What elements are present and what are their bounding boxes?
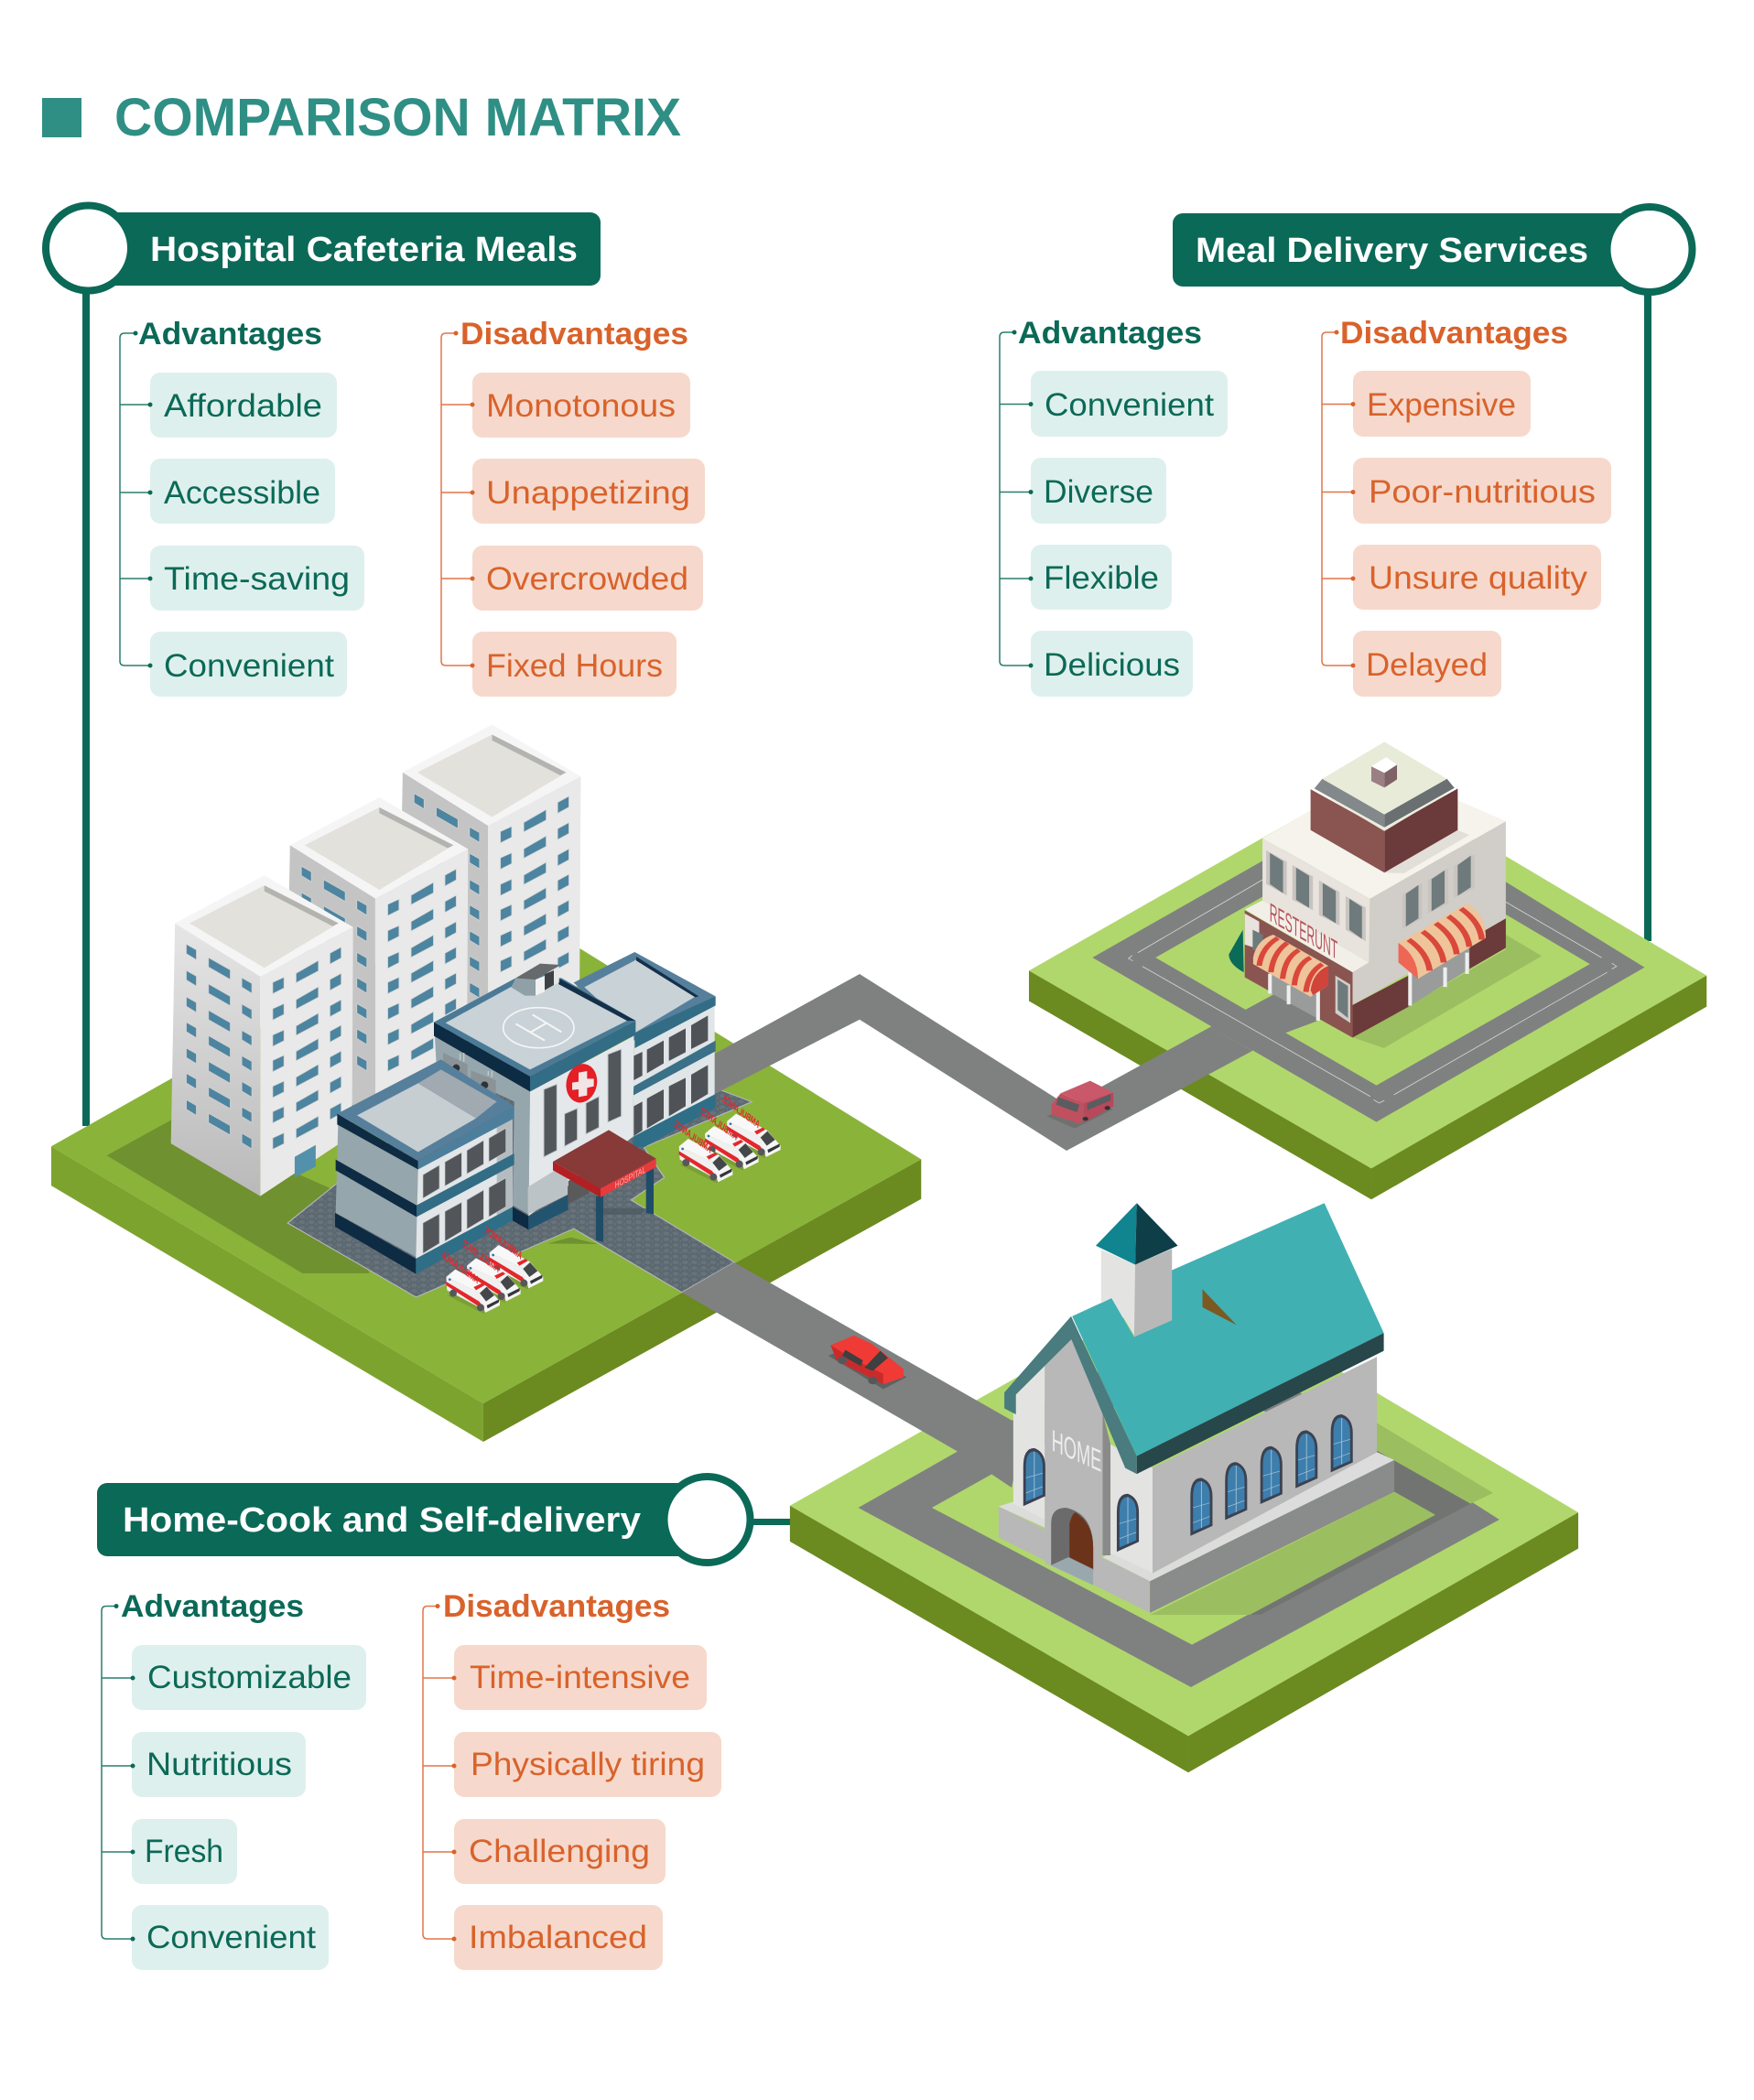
advantage: Delicious: Delicious [1044,647,1180,683]
disadvantages heading: Disadvantages [460,317,688,352]
disadvantages tree [1322,332,1353,666]
connector line: home [746,1519,801,1525]
disadvantage: Physically tiring [454,1732,721,1797]
advantage: Time-saving: Time-saving [164,561,350,597]
tree dots orange [454,331,475,668]
pillars [1270,953,1467,1021]
advantage: Accessible: Accessible [164,475,320,511]
plinth [999,1452,1394,1613]
advantage: Fresh: Fresh [145,1834,223,1869]
restaurant platform [1029,776,1706,1199]
advantage: Diverse [1031,458,1166,524]
disadvantage: Imbalanced [454,1905,663,1970]
disadvantages heading: Disadvantages [1340,316,1568,351]
home illustration: HOME [1052,1423,1101,1478]
disadvantage: Fixed Hours: Fixed Hours [486,648,663,684]
disadvantage: Unappetizing [472,459,705,524]
header bar [1173,213,1649,287]
roof [1004,1203,1384,1474]
connector line: delivery [1644,284,1651,941]
advantage: Affordable: Affordable [164,388,322,424]
disadvantage: Time-intensive [454,1645,707,1710]
header text: Hospital Cafeteria Meals [150,231,578,269]
disadvantage: Challenging: Challenging [469,1834,650,1869]
canopy [547,1130,656,1244]
air conditioners [443,1053,496,1097]
title text: COMPARISON MATRIX [114,88,681,147]
house walls [1013,1335,1377,1586]
advantage: Convenient [150,632,347,697]
delivery van [1046,1081,1113,1129]
restaurant windows [1266,850,1475,941]
advantage: Convenient [1031,371,1228,437]
right wing [574,952,716,1147]
tree dots [114,1604,135,1941]
disadvantage: Poor-nutritious [1353,458,1611,524]
windows [1023,1414,1353,1552]
roof vent [511,964,561,996]
restaurant tower [1311,741,1469,873]
header bar [97,1483,701,1556]
advantage: Time-saving [150,546,364,611]
ambulances: right group [673,1093,781,1183]
advantages tree [1000,332,1031,666]
road: hospital to restaurant [705,974,1252,1151]
ambulances: front group [440,1224,544,1314]
disadvantage: Overcrowded: Overcrowded [486,561,688,597]
connector line: hospital [82,284,90,1126]
advantage: Delicious [1031,631,1193,697]
advantage: Convenient: Convenient [146,1920,316,1955]
restaurant illustration [1046,741,1506,1129]
advantages heading: Advantages [121,1589,304,1624]
tree dots [1012,330,1034,668]
right awning [1399,904,1486,979]
restaurant walls [1245,768,1506,1038]
panel: meal delivery services [1000,207,1692,697]
advantage: Customizable: Customizable [147,1660,352,1695]
disadvantage: Imbalanced: Imbalanced [469,1920,647,1955]
hospital main building [335,952,781,1314]
disadvantage: Overcrowded [472,546,703,611]
advantage: Accessible [150,459,335,524]
advantages tree [102,1606,133,1939]
disadvantage: Time-intensive: Time-intensive [470,1660,690,1695]
disadvantage: Delayed [1353,631,1501,697]
disadvantage: Expensive: Expensive [1367,387,1516,423]
canopy: HOSPITAL [615,1164,646,1191]
restaurant illustration: RESTERUNT [1270,898,1337,966]
disadvantages tree [441,333,472,666]
disadvantage: Unsure quality: Unsure quality [1369,560,1588,596]
back tower [398,725,580,1045]
disadvantage: Unappetizing: Unappetizing [486,475,690,511]
panel: hospital cafeteria meals [46,205,705,697]
advantage: Diverse: Diverse [1044,474,1153,510]
advantage: Nutritious: Nutritious [146,1747,292,1782]
disadvantage: Challenging [454,1819,666,1884]
disadvantages tree [423,1606,454,1939]
header circle [665,1477,751,1563]
hospital platform [51,896,921,1442]
advantage: Nutritious [132,1732,306,1797]
advantage: Fresh [132,1819,237,1884]
disadvantage: Monotonous: Monotonous [486,388,676,424]
main block [434,978,635,1229]
advantages heading: Advantages [138,317,322,352]
disadvantage: Delayed: Delayed [1366,647,1488,683]
advantage: Convenient: Convenient [164,648,334,684]
disadvantages heading: Disadvantages [443,1589,670,1624]
tree [1229,930,1244,972]
red car [828,1336,906,1389]
front tower [171,875,353,1196]
door [1051,1508,1093,1586]
disadvantage: Expensive [1353,371,1531,437]
home platform [790,1281,1578,1772]
advantages heading: Advantages [1018,316,1202,351]
header text: Home-Cook and Self-delivery [123,1501,641,1540]
road: hospital to home [682,1262,1025,1488]
left wing [335,1059,514,1274]
advantage: Flexible: Flexible [1044,560,1159,596]
disadvantage: Poor-nutritious: Poor-nutritious [1369,474,1596,510]
header circle [46,205,131,291]
tree dots orange [1335,330,1356,668]
middle tower [286,797,468,1118]
bell tower [1096,1203,1178,1337]
advantage: Convenient [132,1905,329,1970]
advantage: Flexible [1031,545,1172,610]
advantages tree [120,333,150,666]
header circle [1608,207,1692,292]
left awning [1253,935,1328,997]
disadvantage: Monotonous [472,373,690,438]
hospital towers [171,725,580,1196]
advantage: Customizable [132,1645,366,1710]
title [42,88,681,147]
tree dots orange [436,1604,457,1941]
disadvantage: Fixed Hours [472,632,677,697]
icon: hospital cross [563,1061,601,1106]
disadvantage: Unsure quality [1353,545,1601,610]
disadvantage: Physically tiring: Physically tiring [471,1747,705,1782]
header text: Meal Delivery Services [1196,232,1588,270]
tree dots [134,331,153,668]
panel: home-cook and self-delivery [97,1477,751,1970]
advantage: Affordable [150,373,337,438]
home illustration [999,1203,1394,1613]
advantage: Convenient: Convenient [1045,387,1214,423]
header bar [101,212,601,286]
title marker square [42,98,81,137]
